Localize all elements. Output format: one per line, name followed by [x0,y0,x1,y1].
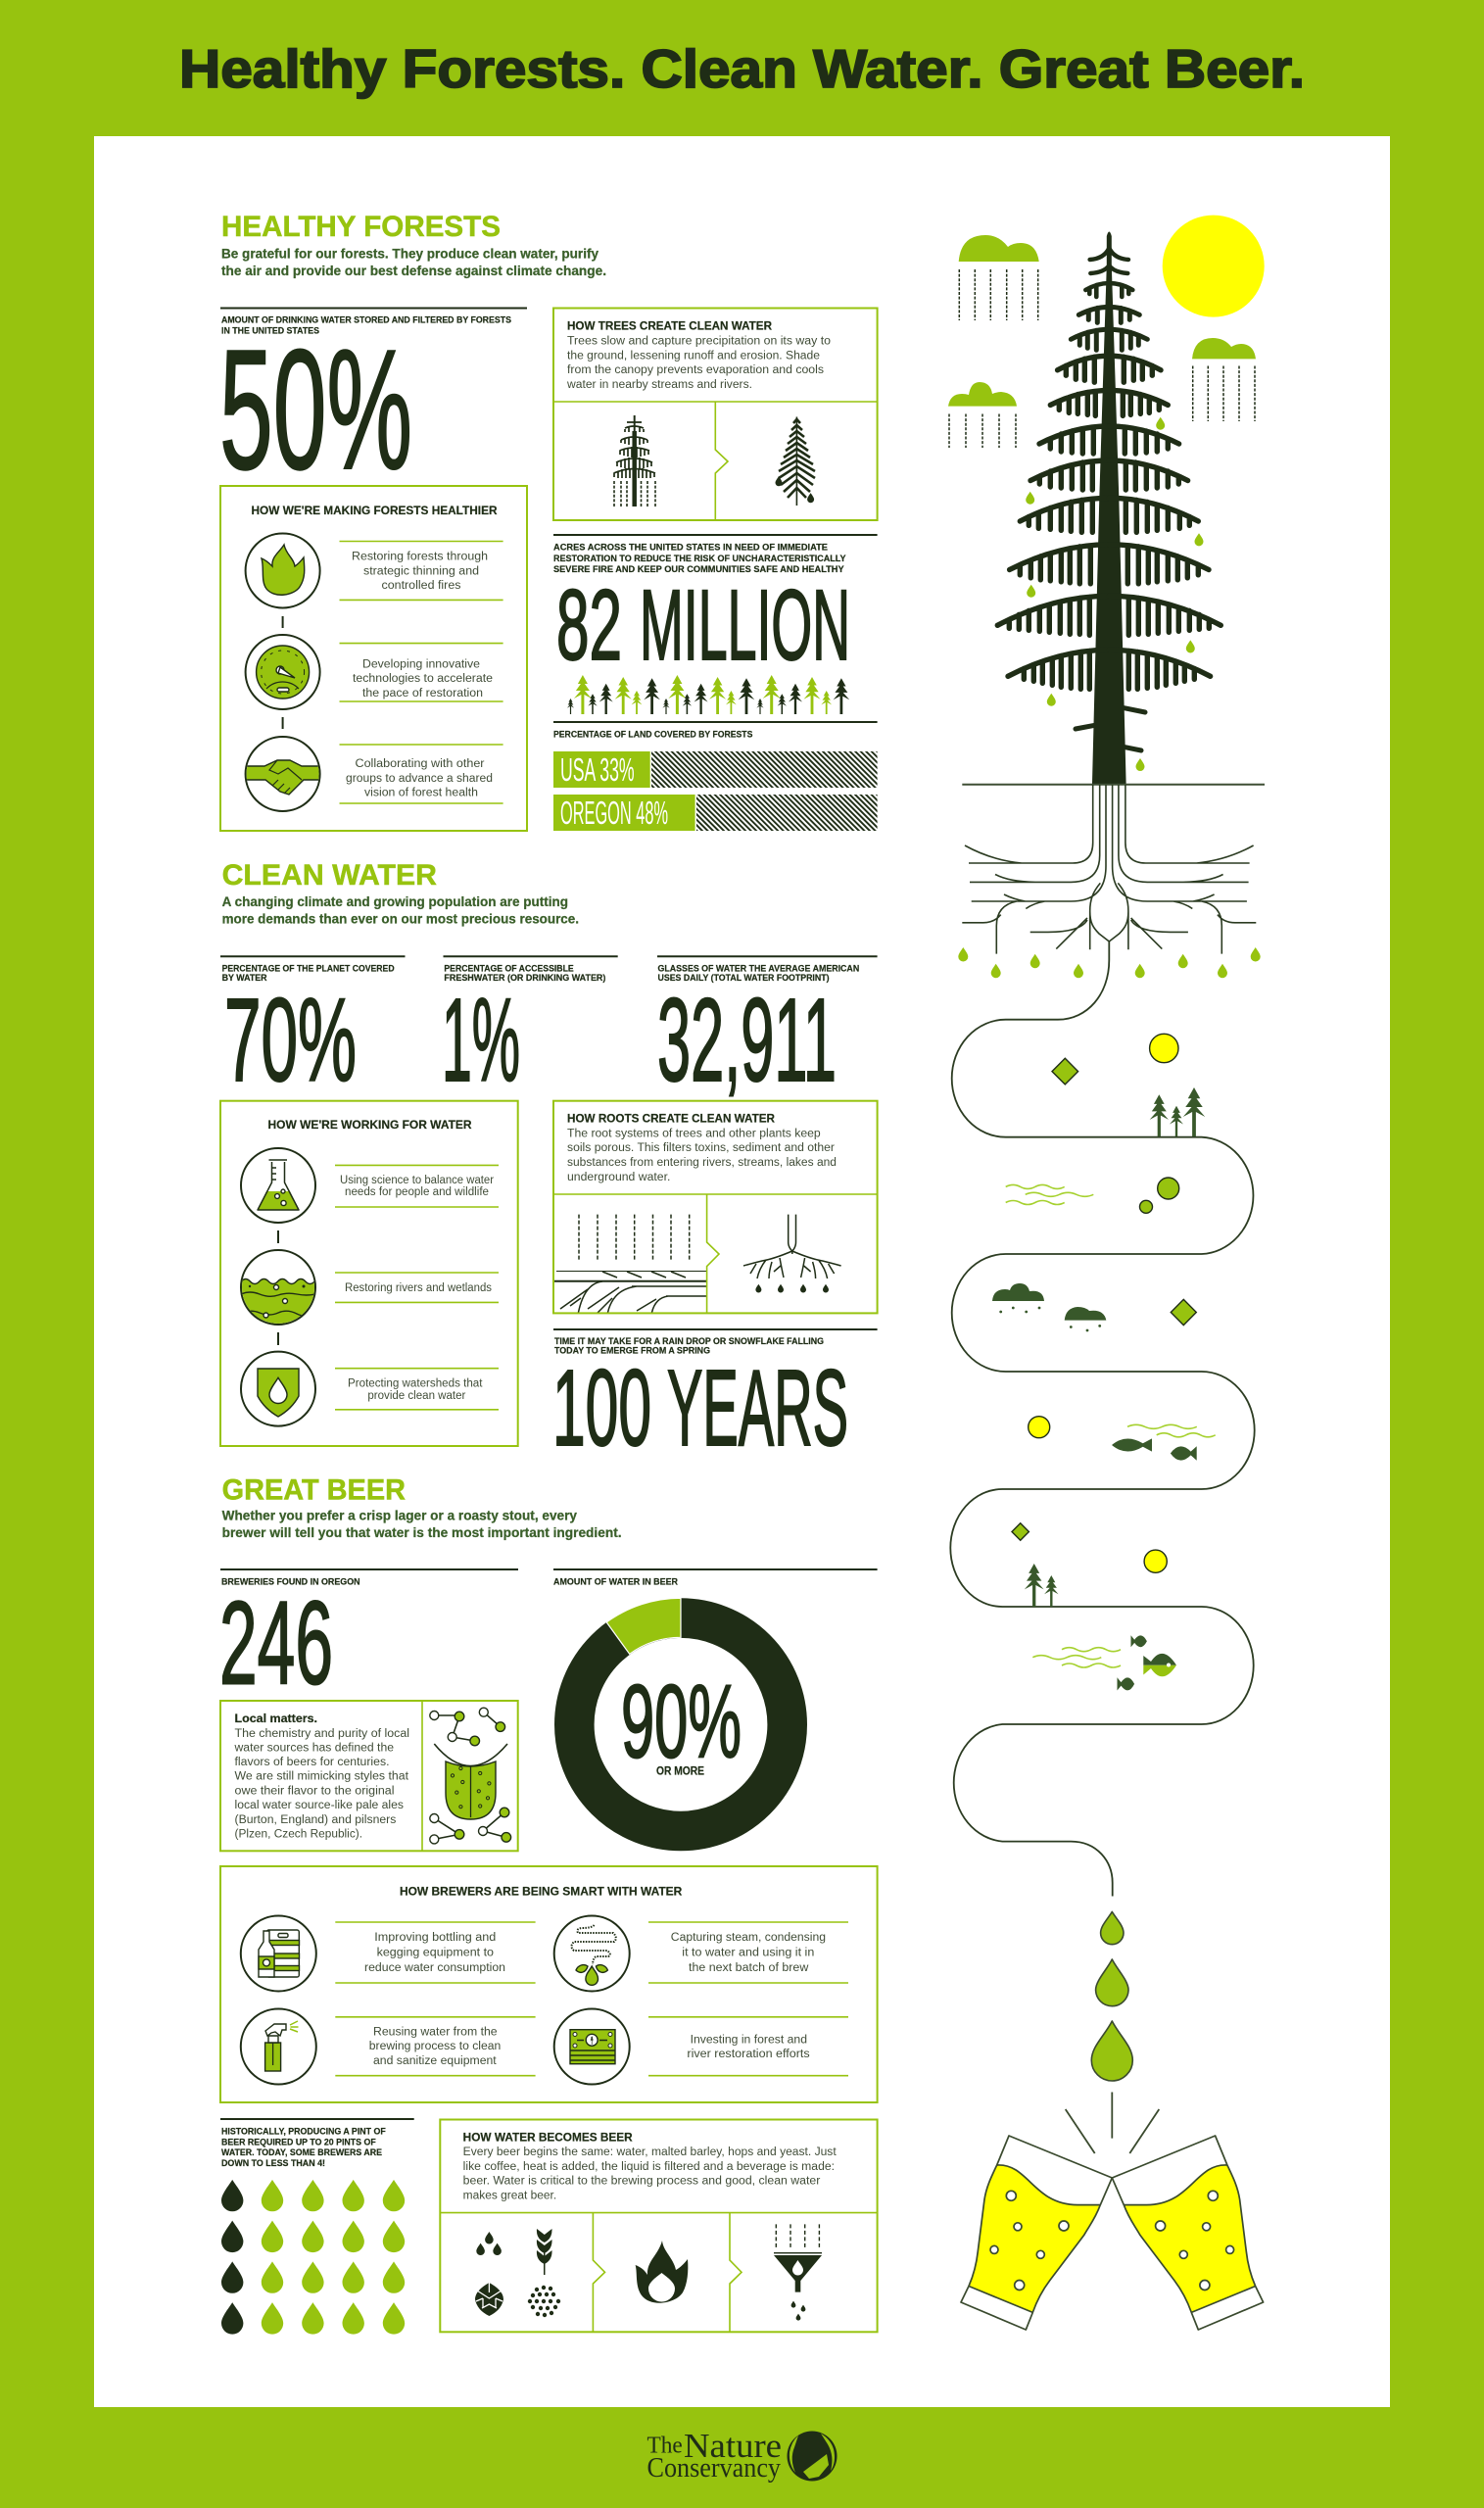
panel: working for water [220,1101,518,1446]
panel: making forests healthier [220,486,527,831]
logo: the nature conservancy [646,2427,837,2484]
heading: HEALTHY FORESTS [221,211,501,243]
panel: local matters: (Plzen, Czech Republic). [235,1828,362,1840]
intro text [222,1509,622,1540]
list text: Collaborating with other [355,758,485,770]
stat: 82 million acres [553,535,878,681]
logo: the nature conservancy: The [646,2434,683,2459]
stat: pints of water with drop grid: WATER. TODAY, SOME BREWERS ARE [221,2147,382,2157]
stat: 246 breweries: BREWERIES FOUND IN OREGON [221,1576,360,1586]
list text: the next batch of brew [689,1962,809,1974]
icon: fire [636,2241,688,2303]
bar chart: forest cover [553,722,878,831]
panel: how trees create clean water: HOW TREES CREATE CLEAN WATER [567,321,773,333]
icon: hop [475,2283,503,2316]
stat: pints of water with drop grid: DOWN TO LESS THAN 4! [221,2158,325,2168]
stat: 1 percent: FRESHWATER (OR DRINKING WATER) [444,973,605,983]
panel: how trees create clean water: Trees slow and capture precipitation on its way to [567,336,831,348]
illustration: cloud with rain, right [1192,338,1256,421]
list text [339,541,503,803]
panel: how trees create clean water [553,308,878,520]
stat: 32,911 glasses: GLASSES OF WATER THE AVERAGE AMERICAN [658,963,859,973]
list text: Developing innovative [362,658,480,670]
illustration: cloud with rain, left [948,382,1017,448]
illustration: clinking beer glasses [961,2136,1264,2330]
list text: and sanitize equipment [373,2055,498,2067]
stat: 50 percent: AMOUNT OF DRINKING WATER STORED AND FILTERED BY FORESTS [221,315,511,325]
stat: 246 breweries [219,1569,518,1709]
intro text: Whether you prefer a crisp lager or a roasty stout, every [222,1509,577,1523]
river scene: third bend [992,1283,1196,1331]
list text: Investing in forest and [691,2034,807,2046]
panel: how roots create clean water: underground water. [567,1172,670,1183]
panel: how roots create clean water: The root systems of trees and other plants keep [567,1128,821,1139]
list text: river restoration efforts [687,2049,810,2060]
list text: it to water and using it in [682,1948,814,1959]
intro text: A changing climate and growing population are putting [222,894,568,909]
panel: how water becomes beer: beer. Water is critical to the brewing process and good, clean water [463,2176,820,2188]
panel: how water becomes beer: makes great beer. [463,2191,556,2202]
illustration: roots [962,785,1256,954]
icon: tree intercepting rain [613,415,655,506]
illustration: falling drops [1091,1911,1132,2081]
icon: rain on rooted soil [554,1215,707,1315]
stat: 100 years: TIME IT MAY TAKE FOR A RAIN DROP OR SNOWFLAKE FALLING [554,1336,824,1346]
stat: 82 million acres: SEVERE FIRE AND KEEP OUR COMMUNITIES SAFE AND HEALTHY [553,564,844,574]
list text: brewing process to clean [369,2041,501,2052]
bar chart: forest cover: OREGON 48% [560,795,668,831]
stat: 32,911 glasses: USES DAILY (TOTAL WATER FOOTPRINT) [658,973,829,983]
stat: 82 million acres: ACRES ACROSS THE UNITED STATES IN NEED OF IMMEDIATE [553,543,828,553]
icon: keg and bottle [241,1916,316,1991]
panel: how water becomes beer: HOW WATER BECOMES BEER [463,2132,633,2144]
stat: 32,911 glasses [657,956,878,1106]
icon: water drops [476,2232,502,2255]
panel: how water becomes beer [440,2120,878,2332]
list text: vision of forest health [364,788,478,799]
icon: filter funnel [774,2224,822,2321]
intro text: Be grateful for our forests. They produce clean water, purify [221,247,598,262]
list text: kegging equipment to [377,1948,494,1959]
heading: GREAT BEER [222,1473,406,1507]
list text: Restoring rivers and wetlands [345,1282,492,1294]
panel: how roots create clean water: HOW ROOTS CREATE CLEAN WATER [567,1114,776,1126]
bar chart: forest cover: USA 33% [560,751,635,788]
panel: local matters: Local matters. [235,1713,317,1725]
list text: Using science to balance water [340,1175,494,1186]
icon: shield with drop [241,1352,315,1426]
panel: how water becomes beer: Every beer begins the same: water, malted barley, hops and yeast. Just [463,2146,838,2158]
list text: Reusing water from the [373,2026,498,2038]
panel: local matters: local water source-like pale ales [235,1800,404,1811]
stat: 70 percent: 70% [224,973,357,1106]
panel: local matters: owe their flavor to the original [235,1786,394,1798]
list text: groups to advance a shared [346,773,493,785]
stat: 100 years [552,1329,878,1469]
icon: flask [241,1148,315,1223]
panel: local matters: water sources has defined the [233,1742,394,1754]
stat: 246 breweries: 246 [219,1575,333,1709]
icon: flame [246,533,320,607]
bar chart: forest cover: PERCENTAGE OF LAND COVERED BY FORESTS [553,729,752,739]
river scene: fourth bend with fish [1029,1417,1216,1461]
panel: how roots create clean water: soils porous. This filters toxins, sediment and other [567,1142,835,1154]
section: healthy forests [219,211,1265,2484]
list text: Improving bottling and [374,1932,496,1944]
donut chart: water in beer: 90% [621,1664,742,1779]
panel: local matters: (Burton, England) and pilsners [235,1814,397,1826]
stat: 70 percent [220,956,406,1106]
stat: 82 million acres: 82 [556,569,622,681]
panel: working for water: HOW WE'RE WORKING FOR WATER [268,1120,472,1132]
illustration: big fir tree [997,231,1221,785]
stat: 1 percent: PERCENTAGE OF ACCESSIBLE [444,963,574,973]
stat: 50 percent: 50% [219,314,412,505]
drop grid [221,2180,405,2335]
heading: CLEAN WATER [222,859,437,892]
list text: technologies to accelerate [353,673,493,685]
panel: how water becomes beer: like coffee, heat is added, the liquid is filtered and a beverage is made: [463,2161,835,2173]
intro text [222,894,579,926]
stat: 100 years: 100 [552,1348,651,1469]
panel: local matters: flavors of beers for centuries. [235,1757,390,1768]
stat: 70 percent: BY WATER [222,973,267,983]
list text: Capturing steam, condensing [671,1932,826,1944]
logo: the nature conservancy: Conservancy [646,2452,781,2484]
icon row: forest trees [567,675,849,714]
panel: how trees create clean water: from the canopy prevents evaporation and cools [567,364,824,376]
icon: handshake [243,737,323,811]
intro text [221,247,606,278]
illustration: ground line [962,784,1265,786]
donut chart: water in beer [553,1569,878,1831]
stat: 70 percent: PERCENTAGE OF THE PLANET COVERED [222,963,395,973]
icon: fir sprig with drops [776,417,815,506]
illustration: sun [1163,216,1265,317]
panel: how roots create clean water [553,1101,878,1315]
river scene: second bend [1006,1178,1179,1213]
stat: 100 years: TODAY TO EMERGE FROM A SPRING [554,1346,710,1356]
river scene: fifth bend [1012,1523,1167,1607]
donut chart: water in beer: AMOUNT OF WATER IN BEER [553,1576,678,1586]
title: Healthy Forests. Clean Water. Great Beer. [179,39,1305,99]
list text: provide clean water [367,1390,466,1402]
intro text: the air and provide our best defense against climate change. [221,264,606,278]
stat: pints of water with drop grid: HISTORICALLY, PRODUCING A PINT OF [221,2126,386,2136]
icon: tongue and molecules [430,1708,511,1844]
list text: reduce water consumption [364,1962,505,1974]
list text: the pace of restoration [362,688,483,699]
intro text: brewer will tell you that water is the most important ingredient. [222,1525,622,1540]
logo: the nature conservancy: Nature [684,2427,782,2465]
icon: money [554,2008,630,2085]
stat: 82 million acres: RESTORATION TO REDUCE THE RISK OF UNCHARACTERISTICALLY [553,554,846,563]
panel: local matters: We are still mimicking styles that [235,1771,409,1783]
drops falling from tree [1026,417,1203,771]
icon: roots releasing drops [743,1215,841,1293]
stat: 100 years: YEARS [667,1348,848,1469]
panel: local matters: The chemistry and purity of local [235,1728,409,1740]
list text: strategic thinning and [363,565,479,577]
panel: how trees create clean water: water in nearby streams and rivers. [566,379,752,391]
illustration: winding river [950,941,1255,1897]
white content panel [94,136,1390,2407]
illustration: clink lines [1066,2093,1159,2153]
list text: Protecting watersheds that [348,1377,483,1389]
stat: 32,911 glasses: 32,911 [657,973,837,1106]
list text: controlled fires [382,580,461,592]
section: great beer [219,216,1265,2484]
river scene: sixth bend with fish [1032,1635,1176,1691]
panel: how roots create clean water: substances from entering rivers, streams, lakes and [567,1157,837,1169]
list text [335,1165,499,1410]
panel: how trees create clean water: the ground, lessening runoff and erosion. Shade [567,351,820,362]
section: clean water [219,216,1265,2484]
stat: 82 million acres: MILLION [640,569,850,681]
donut chart: water in beer: OR MORE [656,1766,704,1778]
panel: brewers being smart with water: HOW BREWERS ARE BEING SMART WITH WATER [400,1886,683,1898]
intro text: more demands than ever on our most precious resource. [222,911,579,926]
stat: 1 percent: 1% [442,973,520,1106]
icon: grains [528,2286,560,2317]
icon: spray bottle [241,2008,316,2085]
icon: condensing steam [554,1916,630,1991]
list text [364,1932,826,2067]
panel: brewers being smart with water [220,1866,878,2102]
icon: gauge [246,635,320,709]
list text: needs for people and wildlife [345,1186,489,1198]
icon: river cross-section [241,1250,315,1327]
illustration: drops below roots [958,947,1261,978]
panel: local matters [220,1701,518,1851]
river scene: first bend [1052,1034,1205,1136]
stat: 50 percent: IN THE UNITED STATES [221,325,319,335]
stat: pints of water with drop grid [220,2119,414,2335]
illustration: cloud with rain, upper left [959,235,1039,320]
panel: making forests healthier: HOW WE'RE MAKING FORESTS HEALTHIER [251,506,498,517]
stat: pints of water with drop grid: BEER REQUIRED UP TO 20 PINTS OF [221,2137,376,2146]
icon: barley [537,2229,552,2275]
list text: Restoring forests through [352,552,488,563]
